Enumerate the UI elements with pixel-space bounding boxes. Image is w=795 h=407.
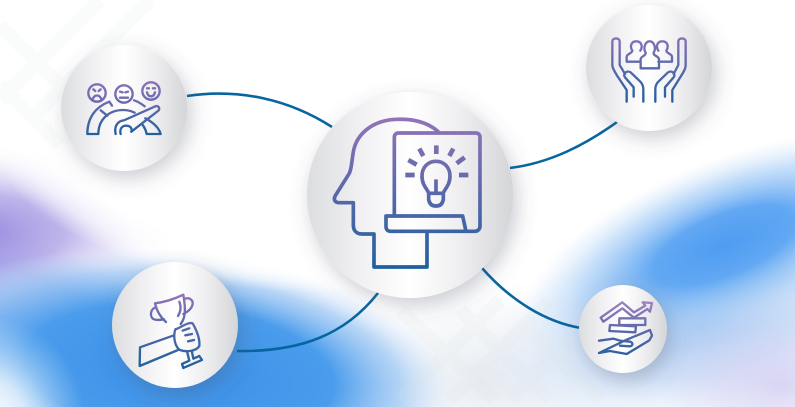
connector: centre to top-left	[187, 94, 332, 127]
icon: hands holding group of people	[612, 38, 686, 102]
bottom-right disc	[579, 285, 667, 373]
arm and fist	[140, 323, 199, 366]
rising arrow	[601, 302, 652, 322]
icon: satisfaction gauge with three faces	[87, 82, 161, 134]
open hand with top block	[599, 330, 652, 354]
right hand	[655, 38, 686, 102]
left hand	[612, 38, 643, 102]
connector: centre to bottom-right	[482, 268, 581, 328]
three people	[627, 41, 672, 68]
sad face	[88, 84, 106, 102]
stacked blocks	[609, 318, 645, 332]
background: faint diagonal grid	[0, 0, 600, 400]
book	[386, 133, 480, 231]
trophy cup	[151, 295, 193, 324]
icon: head with light bulb book	[334, 119, 480, 267]
trophy base	[182, 352, 202, 368]
connector: centre to bottom-left	[237, 293, 378, 351]
gauge	[87, 100, 161, 134]
connector: centre to top-right	[510, 122, 617, 168]
top-right disc	[586, 5, 712, 131]
light bulb	[422, 161, 450, 206]
central disc	[307, 92, 513, 298]
neutral face	[115, 85, 133, 103]
icon: hand raising trophy	[140, 295, 202, 368]
light rays	[405, 145, 468, 175]
head outline	[334, 119, 439, 267]
happy face	[142, 82, 160, 100]
top-left disc	[61, 45, 187, 171]
icon: hand holding stacked books with rising arrow	[599, 302, 652, 354]
bottom-left disc	[112, 262, 238, 388]
